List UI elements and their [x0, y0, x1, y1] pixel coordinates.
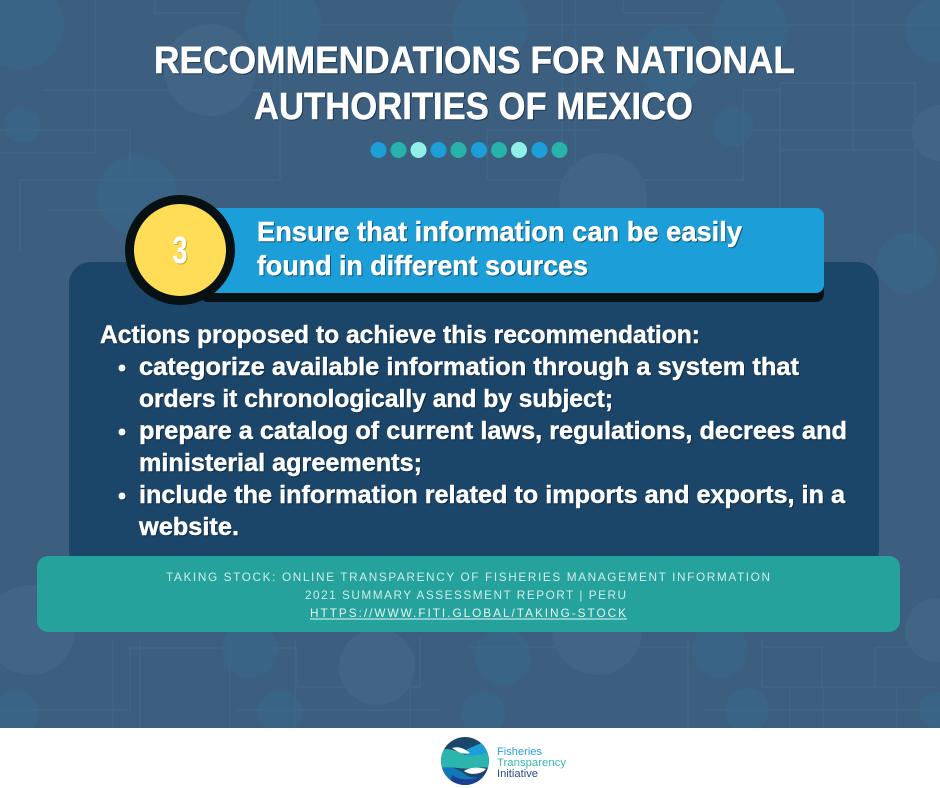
- source text: [166, 570, 770, 620]
- title: AUTHORITIES OF MEXICO: [254, 86, 693, 128]
- number badge: 3: [172, 230, 188, 272]
- actions text: [100, 321, 847, 541]
- action 1: orders it chronologically and by subject;: [139, 385, 613, 413]
- action 3: [118, 481, 846, 541]
- logo: [440, 736, 567, 788]
- logo wordmark: Transparency: [497, 757, 567, 769]
- number badge: [130, 200, 230, 300]
- logo wordmark: [497, 746, 567, 780]
- logo wordmark: Fisheries: [497, 746, 543, 758]
- source panel: [37, 556, 900, 632]
- white footer band: [0, 728, 940, 788]
- actions heading: Actions proposed to achieve this recommendation:: [100, 321, 700, 349]
- action 2: ministerial agreements;: [139, 449, 422, 477]
- decorative dot row: [370, 142, 568, 158]
- recommendation heading: [257, 216, 742, 281]
- recommendation heading: Ensure that information can be easily: [257, 216, 742, 247]
- banner shadow: [200, 218, 824, 302]
- recommendation banner: [130, 200, 824, 302]
- logo wordmark: Initiative: [497, 768, 538, 780]
- action 1: categorize available information through a system that: [139, 353, 800, 381]
- source text: HTTPS://WWW.FITI.GLOBAL/TAKING-STOCK: [310, 606, 626, 620]
- banner bar: [200, 208, 824, 293]
- title: RECOMMENDATIONS FOR NATIONAL: [154, 40, 795, 82]
- action 1: [118, 353, 800, 413]
- icon: FiTI waves: [441, 737, 489, 785]
- panel: actions: [69, 262, 879, 572]
- action 2: prepare a catalog of current laws, regulations, decrees and: [139, 417, 847, 445]
- source text: 2021 SUMMARY ASSESSMENT REPORT | PERU: [305, 588, 626, 602]
- action 2: [118, 417, 847, 477]
- title: [154, 40, 795, 128]
- action 3: include the information related to imports and exports, in a: [139, 481, 846, 509]
- recommendation heading: found in different sources: [257, 250, 588, 281]
- source text: TAKING STOCK: ONLINE TRANSPARENCY OF FISHERIES MANAGEMENT INFORMATION: [166, 570, 770, 584]
- action 3: website.: [138, 513, 239, 541]
